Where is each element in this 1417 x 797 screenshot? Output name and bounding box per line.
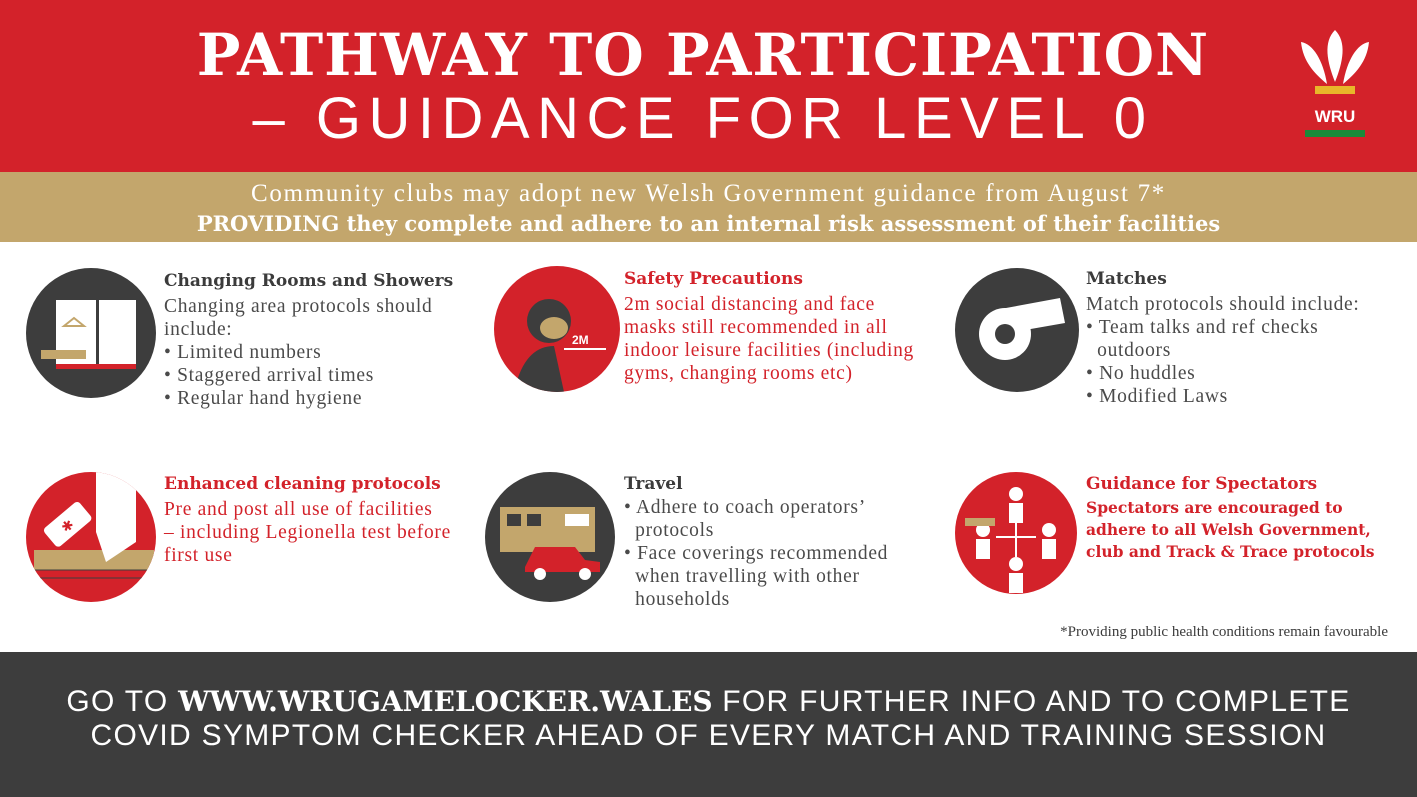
text: • Regular hand hygiene	[164, 388, 362, 409]
title	[197, 21, 1209, 151]
text: when travelling with other	[635, 566, 860, 587]
text: Pre and post all use of facilities	[164, 499, 433, 520]
panel: spectators	[955, 472, 1374, 594]
heading: Travel	[624, 474, 683, 494]
heading: Enhanced cleaning protocols	[164, 474, 441, 494]
heading: Matches	[1086, 269, 1167, 289]
text: • Team talks and ref checks	[1086, 317, 1318, 338]
text: households	[635, 589, 730, 610]
header band	[0, 0, 1417, 172]
icon: changing room	[26, 268, 156, 398]
text: indoor leisure facilities (including	[624, 340, 914, 361]
logo: WRU	[1301, 30, 1369, 137]
text	[164, 296, 432, 409]
footer band	[0, 652, 1417, 797]
icon: spray and wipe: ✱	[58, 516, 77, 536]
panel: matches	[955, 268, 1360, 407]
icon: coach and car	[485, 472, 615, 602]
logo: WRU: WRU	[1315, 107, 1355, 126]
text: – including Legionella test before	[164, 522, 451, 543]
text: Spectators are encouraged to adhere to all Welsh Government, club and Track & Trace protocols	[1086, 498, 1374, 561]
text: gyms, changing rooms etc)	[624, 363, 853, 384]
gold band subtitle: PROVIDING they complete and adhere to an internal risk assessment of their facilities	[197, 211, 1220, 236]
panel: travel	[485, 472, 888, 610]
text: Changing area protocols should	[164, 296, 432, 317]
text: first use	[164, 545, 233, 566]
title: PATHWAY TO PARTICIPATION	[197, 21, 1209, 89]
icon: whistle	[955, 268, 1079, 392]
text: outdoors	[1097, 340, 1171, 361]
icon: mask 2M	[494, 266, 620, 392]
heading: Guidance for Spectators	[1086, 474, 1317, 494]
heading: Safety Precautions	[624, 269, 803, 289]
text: protocols	[635, 520, 714, 541]
footnote: *Providing public health conditions remain favourable	[1060, 624, 1388, 640]
panel: cleaning	[26, 472, 451, 602]
title: – GUIDANCE FOR LEVEL 0	[253, 86, 1153, 151]
text	[624, 497, 888, 610]
text	[164, 499, 451, 566]
footer band: GO TO WWW.WRUGAMELOCKER.WALES FOR FURTHER INFO AND TO COMPLETE	[66, 685, 1351, 718]
panel: safety	[494, 266, 914, 392]
text	[624, 294, 914, 384]
icon: spectators	[955, 472, 1077, 594]
gold band subtitle	[0, 172, 1417, 242]
icon: spray and wipe	[26, 472, 156, 602]
gold band subtitle: Community clubs may adopt new Welsh Government guidance from August 7*	[251, 180, 1166, 207]
text: • Limited numbers	[164, 342, 321, 363]
icon: mask 2M: 2M	[572, 333, 589, 347]
text: • Staggered arrival times	[164, 365, 374, 386]
panel: changing rooms	[26, 268, 453, 409]
text: 2m social distancing and face	[624, 294, 875, 315]
text: • No huddles	[1086, 363, 1195, 384]
text	[1086, 294, 1360, 407]
heading: Changing Rooms and Showers	[164, 271, 453, 291]
text: include:	[164, 319, 232, 340]
footer band: COVID SYMPTOM CHECKER AHEAD OF EVERY MATCH AND TRAINING SESSION	[90, 719, 1326, 752]
text: • Adhere to coach operators’	[624, 497, 866, 518]
text: • Face coverings recommended	[624, 543, 888, 564]
text: masks still recommended in all	[624, 317, 888, 338]
text: Match protocols should include:	[1086, 294, 1360, 315]
text: • Modified Laws	[1086, 386, 1228, 407]
